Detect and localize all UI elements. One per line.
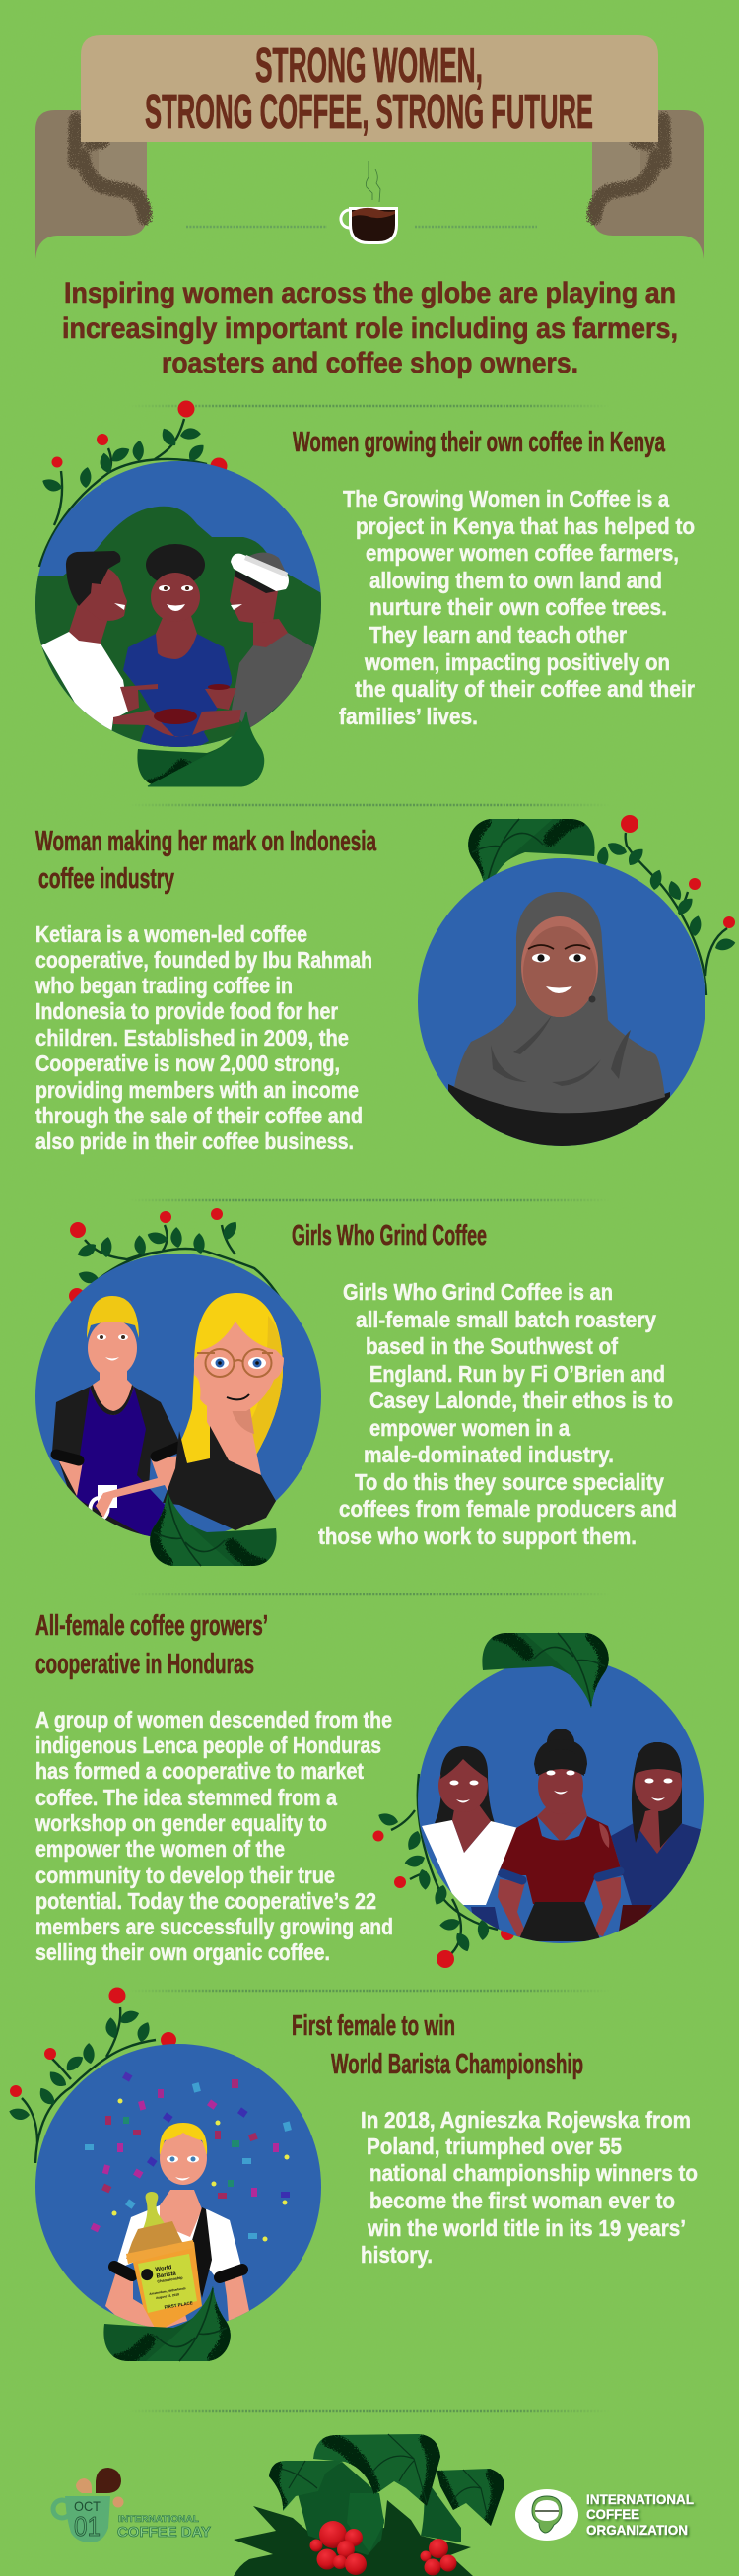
intro text: Inspiring women across the globe are playing an [64,277,676,309]
woman right [230,552,313,731]
body text: workshop on gender equality to [34,1810,327,1836]
heading: cooperative in Honduras [35,1649,254,1680]
vine with berries [596,815,736,995]
heading: Girls Who Grind Coffee [292,1220,487,1252]
plant leaf left [269,2461,343,2511]
body text: history. [361,2242,433,2268]
ribbon fold left [35,110,147,259]
red berries [309,2521,457,2576]
body text: win the world title in its 19 years’ [367,2215,686,2241]
body text: The Growing Women in Coffee is a [343,486,669,511]
body text: male-dominated industry. [364,1442,614,1467]
logo: International Coffee Day [53,2468,211,2542]
body text: Casey Lalonde, their ethos is to [370,1388,673,1413]
body text: through the sale of their coffee and [35,1103,363,1128]
vine with berries [372,1774,514,1968]
icon: ICO emblem [515,2489,578,2541]
body text: allowing them to own land and [370,568,662,593]
body text: nurture their own coffee trees. [370,594,667,620]
body text: coffees from female producers and [339,1496,677,1522]
illustration: two roasters [35,1254,321,1539]
trophy: August 23, 2018 [156,2292,180,2300]
body text: Girls Who Grind Coffee is an [343,1279,613,1305]
body text: national championship winners to [370,2160,698,2186]
trophy: Championship [157,2275,184,2284]
body text: become the first woman ever to [370,2188,675,2213]
body text: has formed a cooperative to market [35,1758,364,1784]
trophy: World [155,2265,172,2273]
logo text [117,2514,211,2541]
body text: all-female small batch roastery [356,1307,656,1332]
heading [292,2010,583,2080]
panel: Indonesia [34,815,736,1154]
heading: World Barista Championship [331,2049,583,2080]
divider around cup [186,226,537,228]
body text: potential. Today the cooperative’s 22 [35,1888,376,1914]
woman centre [123,544,232,749]
panel: Kenya [30,400,695,788]
plant leaf right [437,2469,504,2526]
plant leaf top [313,2434,440,2506]
leaf [150,1491,277,1568]
body text: indigenous Lenca people of Honduras [35,1732,381,1758]
body text [34,1707,393,1965]
body text [34,921,372,1154]
body text: children. Established in 2009, the [35,1025,349,1051]
leaf [137,712,264,788]
leaf [482,1631,609,1708]
heading [35,826,377,895]
trophy: FIRST PLACE [164,2300,193,2310]
body text: providing members with an income [35,1077,359,1103]
body text: empower the women of the [35,1836,285,1862]
vine with berries [69,1208,288,1311]
panel: World Barista Championship [8,1987,698,2363]
woman left [422,1746,518,1932]
woman centre [498,1729,623,1941]
body text: based in the Southwest of [366,1333,618,1359]
icon: beans and cup: OCT [74,2498,101,2514]
body text: those who work to support them. [318,1524,637,1549]
leaf front [148,712,264,786]
logo text: ORGANIZATION [586,2523,688,2538]
heading: First female to win [292,2010,455,2042]
confetti [85,2072,292,2241]
icon: coffee cup with steam [341,161,398,244]
heading: All-female coffee growers’ [35,1610,268,1642]
body text: community to develop their true [35,1863,335,1888]
heading [35,1610,268,1680]
body text: selling their own organic coffee. [35,1939,330,1965]
vine with berries [39,400,227,567]
intro text: roasters and coffee shop owners. [162,347,578,379]
body text [361,2107,698,2268]
body text: They learn and teach other [370,622,627,647]
logo text: INTERNATIONAL [118,2514,199,2525]
body text: cooperative, founded by Ibu Rahmah [35,947,372,973]
title [145,39,593,139]
logo text: INTERNATIONAL [586,2492,694,2507]
panel: Honduras [34,1610,709,1968]
intro text: increasingly important role including as farmers, [62,312,678,345]
coffee plant with berries [234,2434,504,2576]
trophy: Barista [156,2271,177,2280]
body text: A group of women descended from the [35,1707,392,1732]
ribbon banner [81,35,658,142]
leaf [468,817,595,894]
body text [318,1279,677,1549]
body text: project in Kenya that has helped to [356,513,695,539]
body text: coffee. The idea stemmed from a [35,1785,337,1810]
body text: who began trading coffee in [34,973,293,998]
ribbon fold right [592,110,704,259]
leaf [103,2286,231,2363]
heading: Woman making her mark on Indonesia [35,826,377,857]
woman left [41,551,128,734]
title ribbon [35,35,704,259]
woman right [163,1293,284,1530]
woman right [611,1742,701,1932]
logo text: COFFEE DAY [117,2524,211,2541]
panel: Girls Who Grind Coffee [35,1208,677,1568]
body text: women, impacting positively on [364,649,670,675]
body text [339,486,695,729]
body text: Poland, triumphed over 55 [367,2134,622,2159]
body text: empower women coffee farmers, [366,540,679,566]
illustration: three women farmers [30,461,325,759]
body text: the quality of their coffee and their [355,676,695,702]
title: STRONG WOMEN, [255,39,483,93]
illustration: Ibu Rahmah [418,858,705,1153]
logo: International Coffee Organization [515,2489,694,2541]
intro text [62,277,678,379]
heading: coffee industry [38,863,174,895]
body text: In 2018, Agnieszka Rojewska from [361,2107,691,2133]
body text: Cooperative is now 2,000 strong, [35,1051,340,1076]
body text: empower women in a [370,1415,570,1441]
body text: Indonesia to provide food for her [35,998,338,1024]
woman left [52,1296,186,1539]
icon: beans and cup: 01 [74,2511,101,2542]
body text: families’ lives. [339,704,478,729]
trophy [126,2192,202,2329]
body text: also pride in their coffee business. [35,1128,354,1154]
body text: Ketiara is a women-led coffee [35,921,307,947]
vine with berries [8,1987,176,2163]
body text: members are successfully growing and [35,1914,393,1939]
illustration: barista with trophy [35,2044,321,2334]
body text: To do this they source speciality [355,1469,664,1495]
logo text [586,2492,694,2538]
illustration: three women growers [418,1658,709,1951]
logo text: COFFEE [586,2507,639,2522]
body text: England. Run by Fi O’Brien and [370,1361,665,1387]
icon: beans and cup [53,2468,124,2542]
trophy: Amsterdam, Netherlands [149,2286,186,2296]
hands with coffee cherries [113,684,241,737]
